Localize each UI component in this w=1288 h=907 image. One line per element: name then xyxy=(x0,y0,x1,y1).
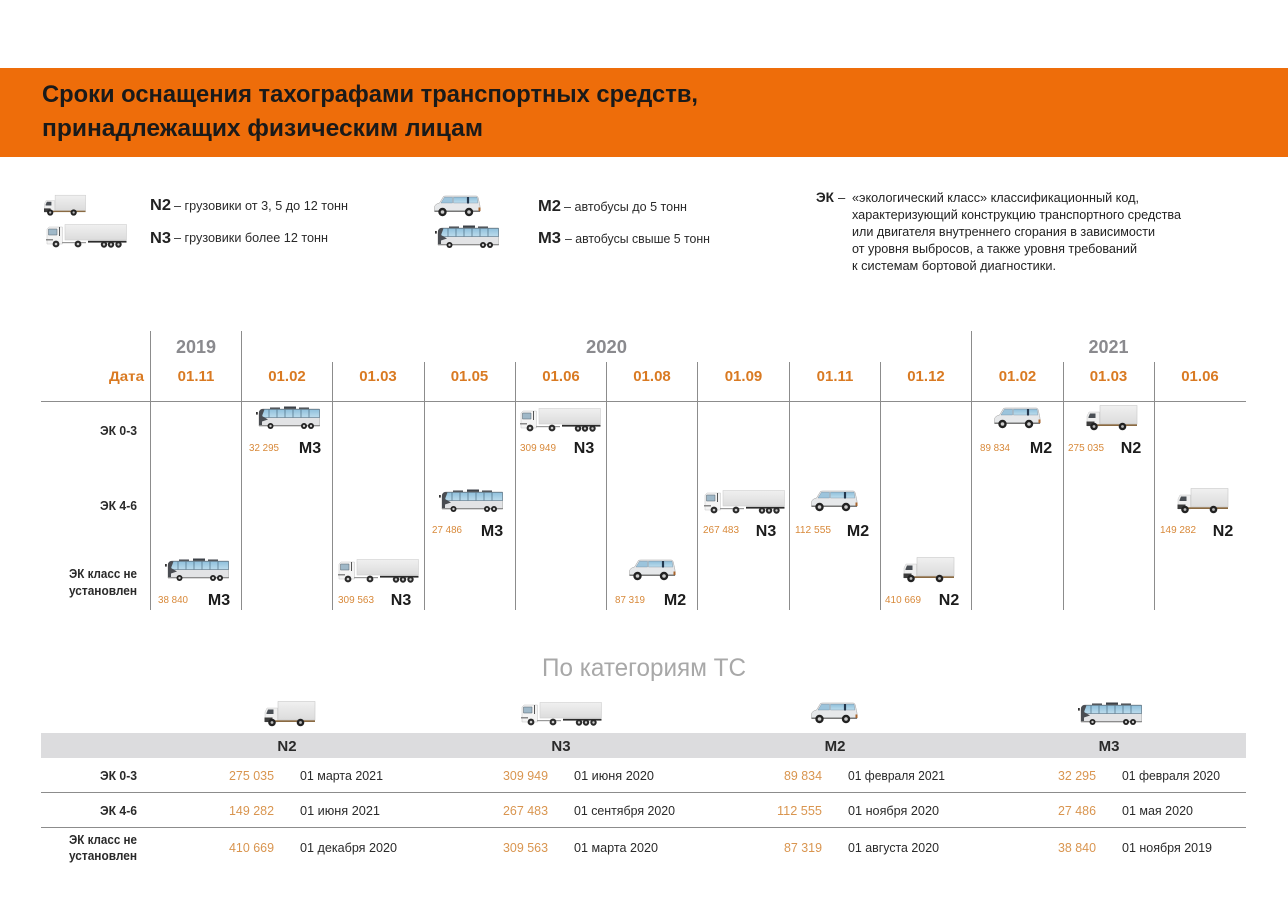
table header band: M3 xyxy=(1099,738,1119,755)
definition of ecological class: «экологический класс» классификационный код, xyxy=(852,190,1139,205)
table row: ЭК 0-3: ЭК 0-3 xyxy=(100,769,137,783)
timeline header: dates: 01.02 xyxy=(268,368,306,385)
category table xyxy=(41,702,1246,863)
entry: N2 410 669: N2 xyxy=(939,592,959,609)
entry: N2 275 035: N2 xyxy=(1121,440,1141,457)
entry: N2 149 282: N2 xyxy=(1213,523,1233,540)
table row: ЭК 4-6: 149 282 xyxy=(229,803,274,818)
section heading: По категориям ТС xyxy=(542,654,746,682)
table row: ЭК класс не установлен: 87 319 xyxy=(784,840,822,855)
entry: N3 309 949 xyxy=(520,408,600,457)
table row: ЭК 4-6: 01 мая 2020 xyxy=(1122,803,1193,818)
legend item: N3: – грузовики более 12 тонн xyxy=(174,230,328,245)
table header band xyxy=(41,733,1246,758)
legend item: N2: N2 xyxy=(150,197,171,214)
table row: ЭК 4-6: 27 486 xyxy=(1058,803,1096,818)
entry: M3 38 840 xyxy=(158,558,230,609)
table row: ЭК 0-3: 32 295 xyxy=(1058,768,1096,783)
table row: ЭК класс не установлен: 309 563 xyxy=(503,840,548,855)
table row: ЭК класс не установлен: 01 марта 2020 xyxy=(574,840,658,855)
table header band: M2 xyxy=(825,738,845,755)
table row: ЭК класс не установлен: 01 ноября 2019 xyxy=(1122,840,1212,855)
timeline header: dates: 01.11 xyxy=(178,368,214,385)
definition of ecological class: – xyxy=(838,190,846,205)
table row: ЭК класс не установлен: 410 669 xyxy=(229,840,274,855)
entry: M2 112 555: 112 555 xyxy=(795,525,831,536)
entry: N2 410 669 xyxy=(885,558,959,609)
entry: N3 309 949: 309 949 xyxy=(520,443,556,454)
entry: N3 309 563: N3 xyxy=(391,592,411,609)
entry: M2 89 834 xyxy=(980,408,1052,457)
table row: ЭК класс не установлен xyxy=(69,833,1212,863)
entry: M3 38 840: 38 840 xyxy=(158,595,188,606)
timeline header: dates: 01.06 xyxy=(1181,368,1219,385)
timeline row labels: ЭК 0-3 xyxy=(100,424,137,438)
entry: N2 275 035: 275 035 xyxy=(1068,443,1104,454)
entry: N2 275 035 xyxy=(1068,406,1141,457)
title banner: Сроки оснащения тахографами транспортных средств, xyxy=(42,81,698,108)
title banner: принадлежащих физическим лицам xyxy=(42,115,483,142)
entry: M3 32 295 xyxy=(249,406,321,457)
entry: M3 38 840: M3 xyxy=(208,592,230,609)
timeline header: years: 2019 xyxy=(176,337,216,357)
table row: ЭК 4-6: 112 555 xyxy=(777,803,822,818)
definition of ecological class: от уровня выбросов, а также уровня требований xyxy=(852,241,1137,256)
table row: ЭК 0-3: 89 834 xyxy=(784,768,822,783)
entry: N3 309 949: N3 xyxy=(574,440,594,457)
timeline row labels xyxy=(69,424,137,598)
legend item: M2: – автобусы до 5 тонн xyxy=(564,199,687,214)
timeline header: dates: 01.03 xyxy=(1090,368,1127,385)
table row: ЭК 4-6 xyxy=(100,803,1193,818)
table header band: N3 xyxy=(551,738,571,755)
definition of ecological class xyxy=(816,189,1182,273)
entry: M2 87 319 xyxy=(615,560,686,609)
entry: N2 149 282 xyxy=(1160,488,1233,540)
entry: M3 27 486: M3 xyxy=(481,523,503,540)
table icons xyxy=(264,702,1142,726)
legend item: N3: N3 xyxy=(150,230,171,247)
entry: M3 27 486: 27 486 xyxy=(432,525,462,536)
timeline row labels: установлен xyxy=(69,584,137,598)
entry: M2 87 319: M2 xyxy=(664,592,686,609)
legend item: M2 xyxy=(434,196,687,216)
legend: vehicle categories xyxy=(44,195,710,248)
entry: N3 267 483 xyxy=(703,490,784,540)
legend item: M3: – автобусы свыше 5 тонн xyxy=(565,231,710,246)
table row: ЭК класс не установлен: установлен xyxy=(69,849,137,863)
entry: M3 32 295: M3 xyxy=(299,440,321,457)
timeline header: dates: 01.11 xyxy=(817,368,853,385)
timeline header: dates: 01.08 xyxy=(633,368,671,385)
title banner xyxy=(0,68,1288,157)
timeline row labels: ЭК 4-6 xyxy=(100,499,137,513)
table row: ЭК 0-3 xyxy=(100,768,1220,783)
timeline header: dates: 01.03 xyxy=(359,368,397,385)
table row: ЭК 4-6: 01 июня 2021 xyxy=(300,803,380,818)
definition of ecological class: к системам бортовой диагностики. xyxy=(852,258,1056,273)
table row: ЭК 4-6: 01 сентября 2020 xyxy=(574,803,675,818)
legend item: N2: – грузовики от 3, 5 до 12 тонн xyxy=(174,198,348,213)
timeline header: dates xyxy=(109,368,1219,385)
table row: ЭК 4-6: 01 ноября 2020 xyxy=(848,803,939,818)
timeline row labels: ЭК класс не xyxy=(69,567,137,581)
entry: N3 267 483: 267 483 xyxy=(703,525,739,536)
definition of ecological class: ЭК xyxy=(816,189,834,205)
legend item: N3 xyxy=(46,224,328,248)
table row: ЭК 4-6: 267 483 xyxy=(503,803,548,818)
timeline header: dates: Дата xyxy=(109,368,144,384)
timeline header: years: 2020 xyxy=(586,337,627,357)
table row: ЭК 0-3: 01 марта 2021 xyxy=(300,768,383,783)
entry: M3 32 295: 32 295 xyxy=(249,443,279,454)
entry: N3 267 483: N3 xyxy=(756,523,776,540)
table row: ЭК класс не установлен: 01 декабря 2020 xyxy=(300,840,397,855)
table row: ЭК 0-3: 01 февраля 2021 xyxy=(848,768,945,783)
timeline entries xyxy=(158,406,1233,609)
entry: M3 27 486 xyxy=(432,490,503,540)
entry: N3 309 563 xyxy=(338,560,418,609)
definition of ecological class: характеризующий конструкцию транспортного средства xyxy=(852,207,1182,222)
timeline header: dates: 01.06 xyxy=(542,368,580,385)
timeline header: dates: 01.09 xyxy=(725,368,762,385)
table row: ЭК класс не установлен: 38 840 xyxy=(1058,840,1096,855)
timeline header: dates: 01.02 xyxy=(999,368,1036,385)
timeline header: years: 2021 xyxy=(1088,337,1128,357)
legend item: N2 xyxy=(44,195,348,216)
entry: N2 149 282: 149 282 xyxy=(1160,525,1196,536)
legend item: M3 xyxy=(435,226,710,248)
table row: ЭК 0-3: 01 июня 2020 xyxy=(574,768,654,783)
table row: ЭК 0-3: 275 035 xyxy=(229,768,274,783)
timeline header: dates: 01.12 xyxy=(907,368,945,385)
legend item: M3: M3 xyxy=(538,230,561,247)
entry: M2 112 555: M2 xyxy=(847,523,869,540)
table row: ЭК 4-6: ЭК 4-6 xyxy=(100,804,137,818)
entry: M2 89 834: M2 xyxy=(1030,440,1052,457)
entry: M2 89 834: 89 834 xyxy=(980,443,1010,454)
timeline grid lines xyxy=(41,331,1246,610)
table header band: N2 xyxy=(277,738,297,755)
timeline header: dates: 01.05 xyxy=(451,368,488,385)
table row: ЭК 0-3: 01 февраля 2020 xyxy=(1122,768,1220,783)
table row: ЭК класс не установлен: ЭК класс не xyxy=(69,833,137,847)
definition of ecological class: или двигателя внутреннего сгорания в зависимости xyxy=(852,224,1155,239)
entry: M2 112 555 xyxy=(795,491,869,540)
legend item: M2: M2 xyxy=(538,198,561,215)
table row: ЭК класс не установлен: 01 августа 2020 xyxy=(848,840,939,855)
table row: ЭК 0-3: 309 949 xyxy=(503,768,548,783)
timeline header: years xyxy=(176,337,1128,357)
entry: M2 87 319: 87 319 xyxy=(615,595,645,606)
entry: N2 410 669: 410 669 xyxy=(885,595,921,606)
entry: N3 309 563: 309 563 xyxy=(338,595,374,606)
